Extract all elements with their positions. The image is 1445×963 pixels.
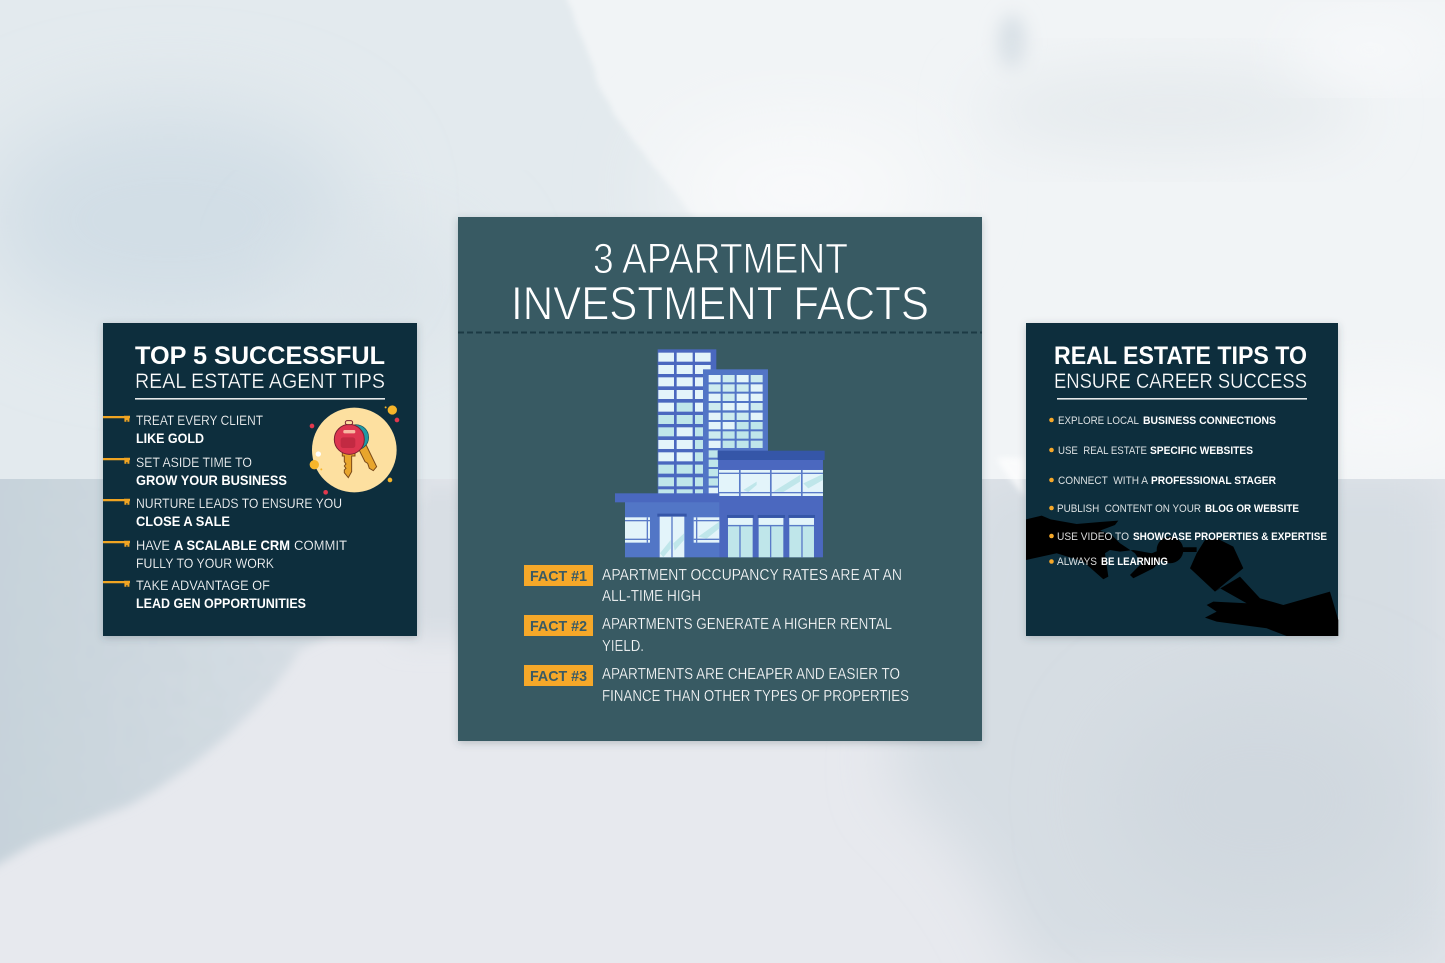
tip: be learning: ALWAYS: [1057, 556, 1097, 568]
tip: be learning: BE LEARNING: [1101, 556, 1168, 568]
tip 5: [103, 577, 306, 611]
icon: key bullet 2: [103, 458, 130, 464]
badge: fact #3: FACT #3: [530, 668, 587, 685]
fact 2: APARTMENTS GENERATE A HIGHER RENTAL: [602, 616, 892, 633]
tip 2: SET ASIDE TIME TO: [136, 454, 252, 470]
badge: fact #2: FACT #2: [530, 618, 587, 635]
icon: key bullet 3: [103, 499, 130, 505]
tip: showcase properties: SHOWCASE PROPERTIES & EXPERTISE: [1133, 531, 1327, 543]
subheading: real estate agent tips: REAL ESTATE AGENT TIPS: [135, 369, 385, 393]
heading: real estate tips to: REAL ESTATE TIPS TO: [1054, 342, 1307, 370]
tip: showcase properties: [1049, 531, 1327, 543]
icon: key bullet 5: [103, 581, 130, 587]
tip 1: TREAT EVERY CLIENT: [136, 412, 263, 428]
tip 3: CLOSE A SALE: [136, 513, 230, 529]
badge: fact #1: FACT #1: [530, 568, 587, 585]
tip: showcase properties: USE VIDEO TO: [1057, 531, 1129, 543]
tip: blog or website: BLOG OR WEBSITE: [1205, 503, 1299, 515]
panel: apartment investment facts: [458, 217, 982, 741]
tip 2: GROW YOUR BUSINESS: [136, 472, 287, 488]
fact 1: APARTMENT OCCUPANCY RATES ARE AT AN: [602, 567, 902, 584]
tip 4: [103, 537, 347, 571]
tip 2: [103, 454, 287, 488]
fact 2: YIELD.: [602, 638, 644, 655]
fact 3: APARTMENTS ARE CHEAPER AND EASIER TO: [602, 666, 900, 683]
tip: specific websites: SPECIFIC WEBSITES: [1150, 445, 1253, 457]
fact 3: FINANCE THAN OTHER TYPES OF PROPERTIES: [602, 688, 909, 705]
panel: career success tips: [1026, 323, 1338, 636]
tip 4: FULLY TO YOUR WORK: [136, 555, 275, 571]
title: investment facts: INVESTMENT FACTS: [511, 276, 929, 330]
tip 3: NURTURE LEADS TO ENSURE YOU: [136, 495, 342, 511]
fact 1: [524, 565, 902, 605]
tip 3: [103, 495, 342, 529]
tip: professional stager: [1049, 475, 1276, 487]
tip 4: A SCALABLE CRM: [174, 537, 290, 553]
tip: business connections: BUSINESS CONNECTIONS: [1143, 415, 1276, 427]
tip: professional stager: CONNECT WITH A: [1058, 475, 1149, 487]
tip: specific websites: USE REAL ESTATE: [1058, 445, 1147, 457]
tip: business connections: EXPLORE LOCAL: [1058, 415, 1139, 427]
tip 1: LIKE GOLD: [136, 430, 204, 446]
heading: top 5 successful: TOP 5 SUCCESSFUL: [135, 342, 385, 370]
fact 1: ALL-TIME HIGH: [602, 588, 701, 605]
tip: specific websites: [1049, 445, 1253, 457]
icon: key bullet 1: [103, 416, 130, 422]
title: 3 apartment: 3 APARTMENT: [593, 235, 848, 283]
tip: professional stager: PROFESSIONAL STAGER: [1151, 475, 1276, 487]
icon: key bullet 4: [103, 541, 130, 547]
subheading: ensure career success: ENSURE CAREER SUCCESS: [1054, 369, 1307, 393]
tip: blog or website: [1049, 503, 1299, 515]
tip 4: HAVE: [136, 537, 170, 553]
tip: be learning: [1049, 556, 1168, 568]
tip: business connections: [1049, 415, 1276, 427]
panel: top 5 agent tips: [103, 323, 417, 636]
tip 4: COMMIT: [294, 537, 347, 553]
tip 5: LEAD GEN OPPORTUNITIES: [136, 595, 306, 611]
fact 2: [524, 615, 892, 655]
illustration: apartment building: [615, 349, 825, 557]
tip 1: [103, 412, 263, 446]
illustration: hands exchanging house key silhouette: [1026, 516, 1338, 636]
fact 3: [524, 665, 909, 705]
tip: blog or website: PUBLISH CONTENT ON YOUR: [1057, 503, 1201, 515]
icon: red keys in yellow circle: [310, 405, 399, 495]
tip 5: TAKE ADVANTAGE OF: [136, 577, 270, 593]
